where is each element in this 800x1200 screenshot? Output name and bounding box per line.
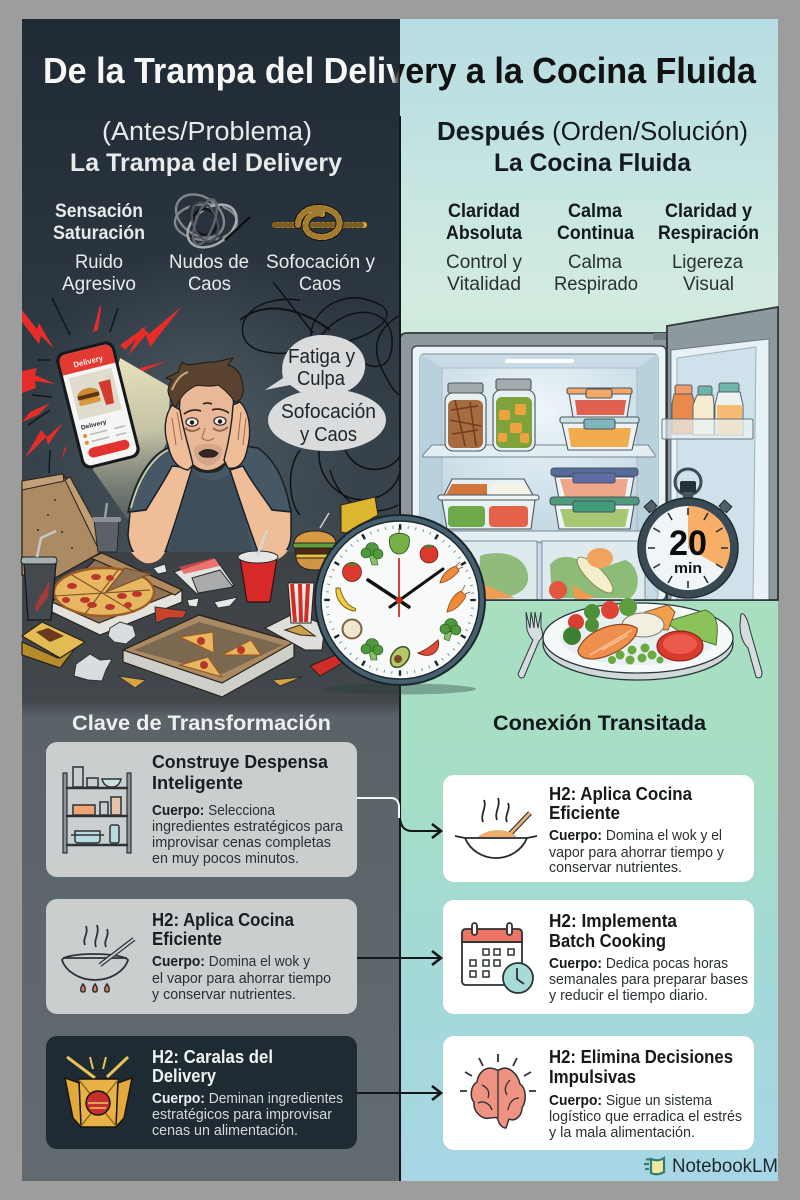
callouts: speech bubbles: Sofocación <box>281 401 376 423</box>
text block: right feature labels <box>446 201 759 295</box>
arrow: card 3 connector <box>357 1086 441 1100</box>
panel: card build pantry: Cuerpo: Selecciona <box>152 802 276 819</box>
icon: jar of vegetables <box>493 379 535 451</box>
icon: takeout box <box>65 1057 132 1127</box>
light beam <box>93 358 170 520</box>
icon: tub with greens <box>550 497 639 529</box>
onion <box>342 620 362 638</box>
panel: card impulsive decisions: Cuerpo: Sigue un sistema <box>549 1092 713 1109</box>
panel: card efficient cooking right: conservar nutrientes. <box>549 859 682 876</box>
figure: stressed man <box>128 358 291 563</box>
icon: black scribbles <box>240 282 400 515</box>
panel: card efficient cooking left: y conservar nutrientes. <box>152 986 296 1003</box>
heading: left column: (Antes/Problema) <box>102 118 312 146</box>
arrow: card 1 connector <box>357 798 441 838</box>
text block: left feature labels: Saturación <box>53 223 145 244</box>
text block: right feature labels: Calma <box>568 251 622 273</box>
icon: notebook <box>644 1158 664 1174</box>
tomato slice <box>418 640 439 655</box>
avocado <box>387 643 413 671</box>
panel: card efficient cooking left: H2: Aplica Cocina <box>152 909 295 930</box>
text block: left feature labels: Caos <box>188 273 231 295</box>
icon: fork <box>518 612 543 678</box>
illustration: organised fridge <box>400 307 778 600</box>
icon: grey cup <box>21 531 57 620</box>
icon: tangled knot <box>168 186 250 256</box>
heading: right column: La Cocina Fluida <box>494 149 692 177</box>
text block: right feature labels: Vitalidad <box>447 273 521 295</box>
title: De la Trampa del Delivery a la Cocina Fluida <box>43 50 757 91</box>
heading: right column <box>437 118 748 177</box>
panel: card efficient cooking left: el vapor para ahorrar tiempo <box>152 970 331 987</box>
text block: left feature labels: Nudos de <box>169 251 249 273</box>
arm overlap on table <box>131 550 288 563</box>
text block: right feature labels: Claridad <box>448 201 520 222</box>
icon: wok with flames <box>62 925 134 992</box>
icon: stopwatch 20 min <box>638 469 738 598</box>
icon: open pizza box lid <box>22 474 105 578</box>
text block: left feature labels: Ruido <box>75 251 123 273</box>
divider line <box>399 116 401 1181</box>
icon: tub with pasta <box>560 417 639 450</box>
panel: card impulsive decisions: Impulsivas <box>549 1066 636 1087</box>
panel: card batch cooking: Cuerpo: Dedica pocas horas <box>549 955 728 972</box>
text block: left feature labels: Caos <box>299 273 341 295</box>
carrot 2 <box>447 585 470 612</box>
icon: divided tray with food <box>438 479 539 529</box>
heading: right column: Después (Orden/Solución) <box>437 118 748 146</box>
fridge body <box>400 333 680 600</box>
panel: card delivery dark: estratégicos para improvisar <box>152 1106 332 1123</box>
panel: card delivery dark: H2: Caralas del <box>152 1046 273 1067</box>
panel: card build pantry: en muy pocos minutos. <box>152 850 299 867</box>
panel: card batch cooking: Batch Cooking <box>549 930 666 951</box>
panel: card delivery dark: Delivery <box>152 1065 217 1086</box>
text block: left feature labels <box>53 201 375 295</box>
table <box>22 552 400 717</box>
icon: pizza box with pizza <box>52 553 182 635</box>
icon: tray with fries <box>265 583 344 676</box>
text block: right feature labels: Ligereza <box>672 251 743 273</box>
icon: back grey cup <box>92 503 121 552</box>
heading: left column: La Trampa del Delivery <box>70 149 342 177</box>
panel: card efficient cooking left <box>46 899 357 1014</box>
heading: key of transformation: Clave de Transformación <box>72 712 331 735</box>
panel: card build pantry: Inteligente <box>152 772 243 793</box>
panel: card build pantry <box>46 742 357 877</box>
icon: phone with delivery app: Delivery <box>81 419 108 432</box>
icon: calendar with clock <box>462 923 533 993</box>
panel: card efficient cooking left: Cuerpo: Domina el wok y <box>152 953 310 970</box>
panel: card batch cooking: H2: Implementa <box>549 910 678 931</box>
heading: connection: Conexión Transitada <box>493 712 706 735</box>
panel: card efficient cooking right: H2: Aplica Cocina <box>549 783 693 804</box>
panel: card build pantry: Construye Despensa <box>152 751 329 772</box>
text block: right feature labels: Continua <box>557 223 634 244</box>
panel: card batch cooking: semanales para preparar bases <box>549 971 748 988</box>
icon: bottles on door shelf <box>672 383 743 435</box>
icon: plate with salmon meal <box>543 598 733 680</box>
panel: card delivery dark <box>46 1036 357 1149</box>
tomato right <box>420 545 438 563</box>
icon: wok <box>455 798 537 858</box>
pepper top <box>389 528 409 554</box>
panel: card batch cooking: y reducir el tiempo diario. <box>549 987 708 1004</box>
text block: right feature labels: Claridad y <box>665 201 752 222</box>
panel: card delivery dark: cenas un alimentación. <box>152 1122 298 1139</box>
panel: card build pantry: improvisar cenas completas <box>152 834 331 851</box>
panel: card efficient cooking right: Eficiente <box>549 802 620 823</box>
icon: phone with delivery app <box>54 340 142 470</box>
callouts: speech bubbles: y Caos <box>300 424 357 446</box>
icon: knife <box>740 614 762 678</box>
text block: right feature labels: Calma <box>568 201 622 222</box>
icon: tub with salmon <box>551 468 638 499</box>
icon: tub with strawberries <box>567 388 632 417</box>
text block: left feature labels: Agresivo <box>62 273 136 295</box>
shelves <box>423 445 655 542</box>
icon: phone with delivery app: Delivery <box>73 353 104 370</box>
fridge door <box>662 307 778 600</box>
panel: card delivery dark: Cuerpo: Deminan ingredientes <box>152 1090 343 1107</box>
text block: right feature labels: Control y <box>446 251 522 273</box>
icon: burger <box>293 513 336 570</box>
logo: NotebookLM: NotebookLM <box>672 1155 778 1177</box>
broccoli top <box>361 542 383 565</box>
icon: empty pizza box <box>123 615 294 697</box>
panel: left dark background <box>22 19 400 1181</box>
icon: jar of nuts <box>445 383 486 451</box>
callouts: speech bubbles: Fatiga y <box>288 346 355 368</box>
text block: right feature labels: Absoluta <box>446 223 522 244</box>
tomato left <box>342 562 362 582</box>
icon: crumpled papers and trash <box>74 564 302 688</box>
text block: left feature labels: Sofocación y <box>266 251 375 273</box>
icon: wall clock with vegetables <box>314 514 486 694</box>
panel: card efficient cooking right: Cuerpo: Domina el wok y el <box>549 827 722 844</box>
icon: brain <box>460 1054 536 1128</box>
panel: card efficient cooking right: vapor para ahorrar tiempo y <box>549 844 724 861</box>
callouts: speech bubbles: Culpa <box>297 368 346 390</box>
icon: stopwatch 20 min: 20 <box>669 524 707 563</box>
icon: burger box <box>22 622 85 668</box>
heading: left column <box>70 118 342 177</box>
icon: white wrapper <box>174 558 234 594</box>
text block: right feature labels: Visual <box>683 273 734 295</box>
panel: card impulsive decisions <box>443 1036 754 1150</box>
icon: pantry shelf <box>63 767 131 853</box>
text block: left feature labels: Sensación <box>55 201 143 222</box>
panel: card batch cooking <box>443 900 754 1014</box>
icon: rope knot <box>275 208 364 237</box>
banana <box>336 588 356 611</box>
arrow: card 2 connector <box>357 951 441 965</box>
panel: right light background <box>400 19 778 1181</box>
text block: right feature labels: Respiración <box>658 223 759 244</box>
callouts: speech bubbles <box>265 335 386 451</box>
broccoli bottom <box>361 638 383 660</box>
icon: stopwatch 20 min: min <box>674 560 702 577</box>
panel: card impulsive decisions: y la mala alimentación. <box>549 1124 695 1141</box>
icon: red cup <box>238 530 278 602</box>
icon: lightning bolts <box>22 305 182 460</box>
text block: right feature labels: Respirado <box>554 273 638 295</box>
panel: card impulsive decisions: H2: Elimina Decisiones <box>549 1046 733 1067</box>
panel: card efficient cooking left: Eficiente <box>152 928 222 949</box>
counter <box>400 599 778 601</box>
clock hands <box>368 580 409 607</box>
broccoli right <box>440 618 461 641</box>
icon: yellow snack bag <box>341 497 378 533</box>
panel: card impulsive decisions: logístico que erradica el estrés <box>549 1108 742 1125</box>
panel: card build pantry: ingredientes estratégicos para <box>152 818 344 835</box>
carrot 1 <box>440 562 463 583</box>
panel: card efficient cooking right <box>443 775 754 882</box>
drawers with vegetables <box>425 541 645 600</box>
illustration: chaos scene <box>21 282 400 717</box>
